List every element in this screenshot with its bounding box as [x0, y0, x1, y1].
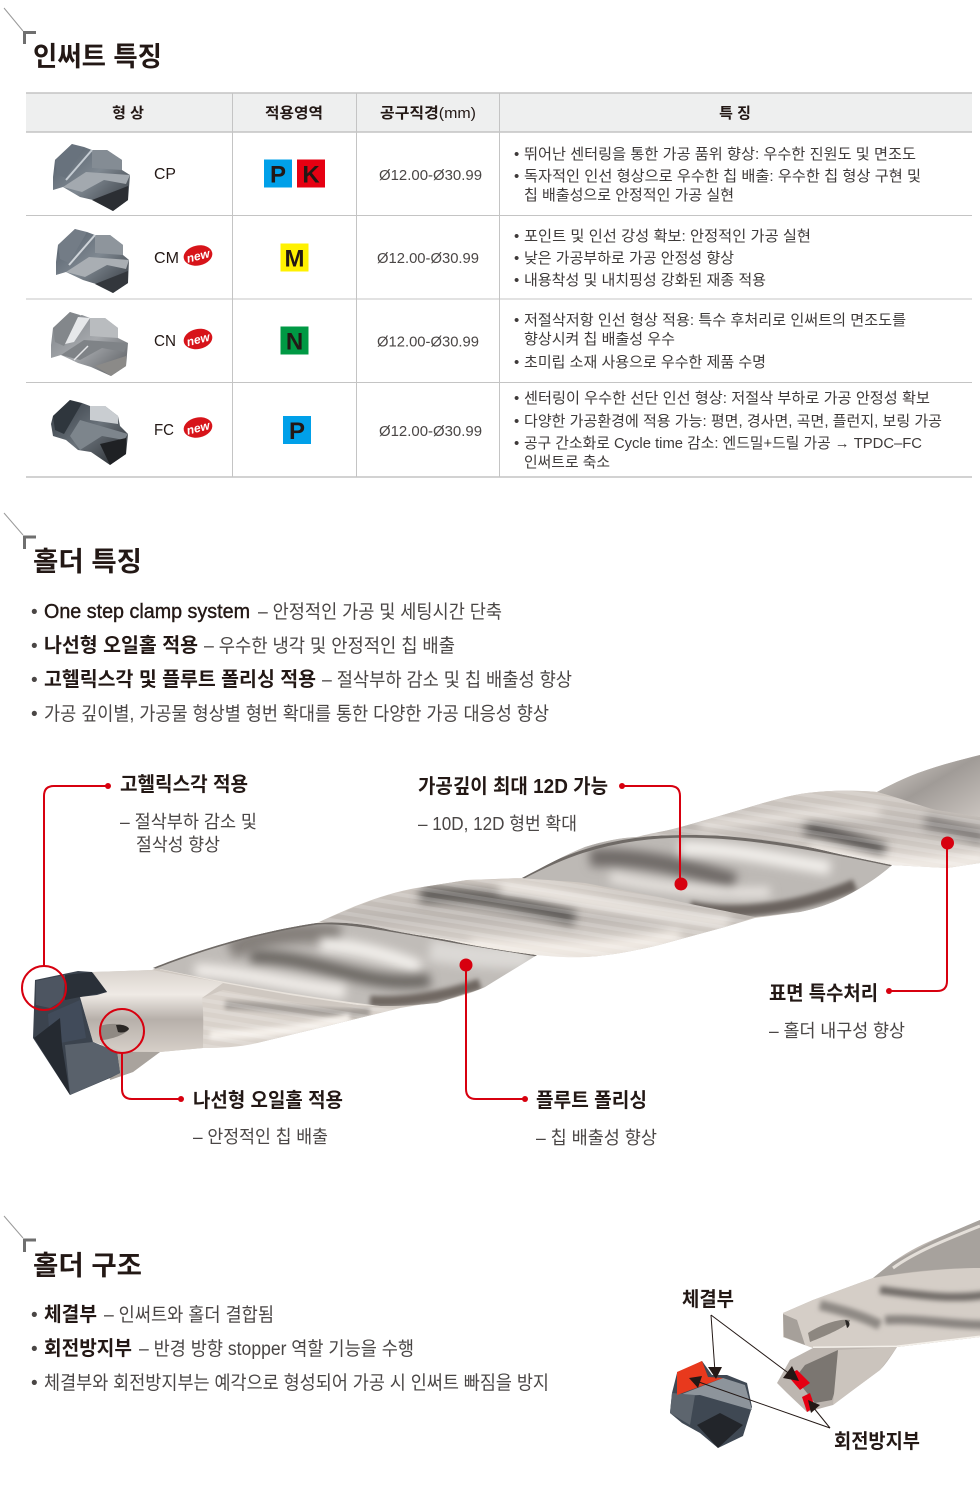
drill body base silhouette	[90, 755, 980, 1080]
features: FC: 다양한 가공환경에 적용 가능: 평면, 경사면, 곡면, 플런지, 보링 가공	[524, 413, 942, 430]
list: holder features: •	[31, 602, 38, 623]
section heading: insert features: 인써트 특징	[33, 42, 162, 72]
features: CP: 칩 배출성으로 안정적인 가공 실현	[524, 187, 734, 204]
features: FC: •	[514, 390, 519, 407]
flute 1	[153, 922, 537, 1006]
icon: CN insert	[51, 312, 128, 376]
label: fastening part: 체결부	[682, 1288, 734, 1311]
callout: machining depth: – 10D, 12D 형번 확대	[418, 814, 577, 834]
list: holder structure: •	[31, 1305, 38, 1326]
badge: N: N	[286, 328, 303, 356]
label: CM with new badge: new	[185, 246, 212, 266]
badges: P and K: K	[302, 162, 320, 188]
callout: spiral oil hole: 나선형 오일홀 적용	[193, 1089, 343, 1112]
flute 3	[877, 755, 980, 817]
callout: machining depth	[418, 775, 688, 890]
features: FC	[514, 390, 942, 471]
callout: surface treatment	[769, 836, 954, 1041]
flute 2	[522, 835, 892, 917]
section heading: holder features: 홀더 특징	[33, 547, 142, 577]
features: CM: 내용착성 및 내치핑성 강화된 재종 적용	[524, 272, 766, 289]
callout: flute polishing	[460, 958, 657, 1148]
features: CN: 향상시켜 칩 배출성 우수	[524, 331, 675, 348]
list: holder features: •	[31, 670, 38, 691]
label: CN with new badge	[154, 326, 214, 352]
callout: high helix angle: 절삭성 향상	[136, 835, 220, 855]
label: CN with new badge: CN	[154, 333, 176, 350]
features: FC: •	[514, 413, 519, 430]
features: CN: •	[514, 354, 519, 371]
table header row: 공구직경(mm)	[380, 105, 476, 122]
oil hole	[100, 1024, 129, 1040]
label: FC with new badge	[154, 415, 214, 440]
list: holder structure: •	[31, 1339, 38, 1360]
badge: P	[283, 416, 311, 445]
features: CN: 초미립 소재 사용으로 우수한 제품 수명	[524, 354, 766, 371]
badge: P: P	[289, 418, 305, 445]
insert tip	[33, 971, 120, 1095]
head body	[80, 970, 223, 1052]
features: CP	[514, 146, 921, 204]
callout: flute polishing: 플루트 폴리싱	[536, 1089, 647, 1112]
section heading: insert features	[4, 8, 162, 72]
callout: high helix angle	[22, 773, 257, 1010]
label: FC with new badge: FC	[154, 422, 174, 439]
list: holder structure: – 반경 방향 stopper 역할 기능을 수행	[139, 1338, 414, 1360]
features: CM: •	[514, 250, 519, 267]
label: anti-rotation part: 회전방지부	[834, 1430, 920, 1453]
list: holder structure	[31, 1303, 549, 1394]
table header row: 적용영역	[265, 105, 323, 122]
land 2	[635, 785, 980, 870]
land 1	[315, 875, 760, 960]
label: CP: CP	[154, 166, 176, 183]
callout: high helix angle: – 절삭부하 감소 및	[120, 812, 257, 832]
illustration: detached insert	[670, 1361, 752, 1448]
lower land	[202, 990, 400, 1048]
list: holder structure: •	[31, 1373, 38, 1394]
list: holder features: – 절삭부하 감소 및 칩 배출성 향상	[322, 669, 572, 691]
features: CM	[514, 228, 811, 289]
badge: M	[280, 244, 308, 272]
list: holder features: – 안정적인 가공 및 세팅시간 단축	[258, 601, 502, 623]
list: holder structure: 체결부	[44, 1303, 97, 1326]
diameter range: CP: Ø12.00-Ø30.99	[379, 167, 482, 184]
list: holder features: – 우수한 냉각 및 안정적인 칩 배출	[204, 635, 455, 657]
callout: surface treatment: – 홀더 내구성 향상	[769, 1021, 905, 1041]
label: CM with new badge	[154, 243, 214, 268]
list: holder features: One step clamp system	[44, 601, 250, 623]
section heading: holder structure: 홀더 구조	[33, 1251, 142, 1281]
list: holder structure: – 인써트와 홀더 결합됨	[104, 1304, 274, 1326]
list: holder features: 나선형 오일홀 적용	[44, 634, 198, 657]
features: CP: 뛰어난 센터링을 통한 가공 품위 향상: 우수한 진원도 및 면조도	[524, 146, 916, 163]
features: CN: 저절삭저항 인선 형상 적용: 특수 후처리로 인써트의 면조도를	[524, 312, 906, 329]
list: holder features: 가공 깊이별, 가공물 형상별 형번 확대를 통한 다양한 가공 대응성 향상	[44, 703, 549, 725]
features: CM: •	[514, 272, 519, 289]
label: CN with new badge: new	[185, 330, 212, 349]
diameter range: CM: Ø12.00-Ø30.99	[377, 250, 479, 267]
features: FC: 센터링이 우수한 선단 인선 형상: 저절삭 부하로 가공 안정성 확보	[524, 390, 930, 407]
features: CM: •	[514, 228, 519, 245]
callout: flute polishing: – 칩 배출성 향상	[536, 1128, 657, 1148]
list: holder features: 고헬릭스각 및 플루트 폴리싱 적용	[44, 668, 316, 691]
callout: spiral oil hole	[100, 1009, 343, 1147]
features: CM: 낮은 가공부하로 가공 안정성 향상	[524, 250, 734, 267]
table: insert features	[26, 93, 972, 477]
diameter range: FC: Ø12.00-Ø30.99	[379, 423, 482, 440]
callout: surface treatment: 표면 특수처리	[769, 982, 878, 1005]
features: CN	[514, 312, 906, 371]
callout: high helix angle: 고헬릭스각 적용	[120, 773, 248, 796]
section heading: holder features	[4, 513, 142, 577]
list: holder structure: 회전방지부	[44, 1337, 132, 1360]
features: CP: 독자적인 인선 형상으로 우수한 칩 배출: 우수한 칩 형상 구현 및	[524, 168, 921, 185]
icon: CM insert	[56, 229, 129, 293]
features: CP: •	[514, 168, 519, 185]
badges: P and K: P	[270, 162, 286, 188]
table header row: 특 징	[719, 105, 751, 122]
list: holder features	[31, 601, 572, 725]
icon: FC insert	[51, 400, 128, 465]
table header row: 형 상	[112, 105, 144, 122]
list: holder features: •	[31, 636, 38, 657]
list: holder structure: 체결부와 회전방지부는 예각으로 형성되어 가공 시 인써트 빠짐을 방지	[44, 1372, 549, 1394]
features: CP: •	[514, 146, 519, 163]
features: CN: •	[514, 312, 519, 329]
drill illustration	[33, 755, 980, 1095]
lower flute shadow	[110, 1052, 160, 1080]
arrows: anti-rotation part	[689, 1376, 830, 1428]
label: CM with new badge: CM	[154, 250, 179, 267]
features: FC: •	[514, 435, 519, 452]
icon: CP insert	[53, 144, 130, 211]
badge: M: M	[284, 246, 304, 272]
section heading: holder structure	[4, 1216, 142, 1281]
label: FC with new badge: new	[185, 418, 212, 438]
badges: P and K	[264, 160, 325, 188]
features: FC: 공구 간소화로 Cycle time 감소: 엔드밀+드릴 가공 → TPDC–FC	[524, 435, 922, 452]
illustration: holder tip	[777, 1220, 980, 1412]
arrows: fastening part	[708, 1315, 799, 1381]
badge: N	[280, 326, 308, 356]
features: FC: 인써트로 축소	[524, 454, 610, 471]
table header row	[26, 93, 972, 132]
diameter range: CN: Ø12.00-Ø30.99	[377, 334, 479, 350]
features: CM: 포인트 및 인선 강성 확보: 안정적인 가공 실현	[524, 228, 811, 245]
table grid lines	[26, 93, 972, 477]
list: holder features: •	[31, 704, 38, 725]
callout: machining depth: 가공깊이 최대 12D 가능	[418, 775, 608, 798]
callout: spiral oil hole: – 안정적인 칩 배출	[193, 1127, 328, 1147]
